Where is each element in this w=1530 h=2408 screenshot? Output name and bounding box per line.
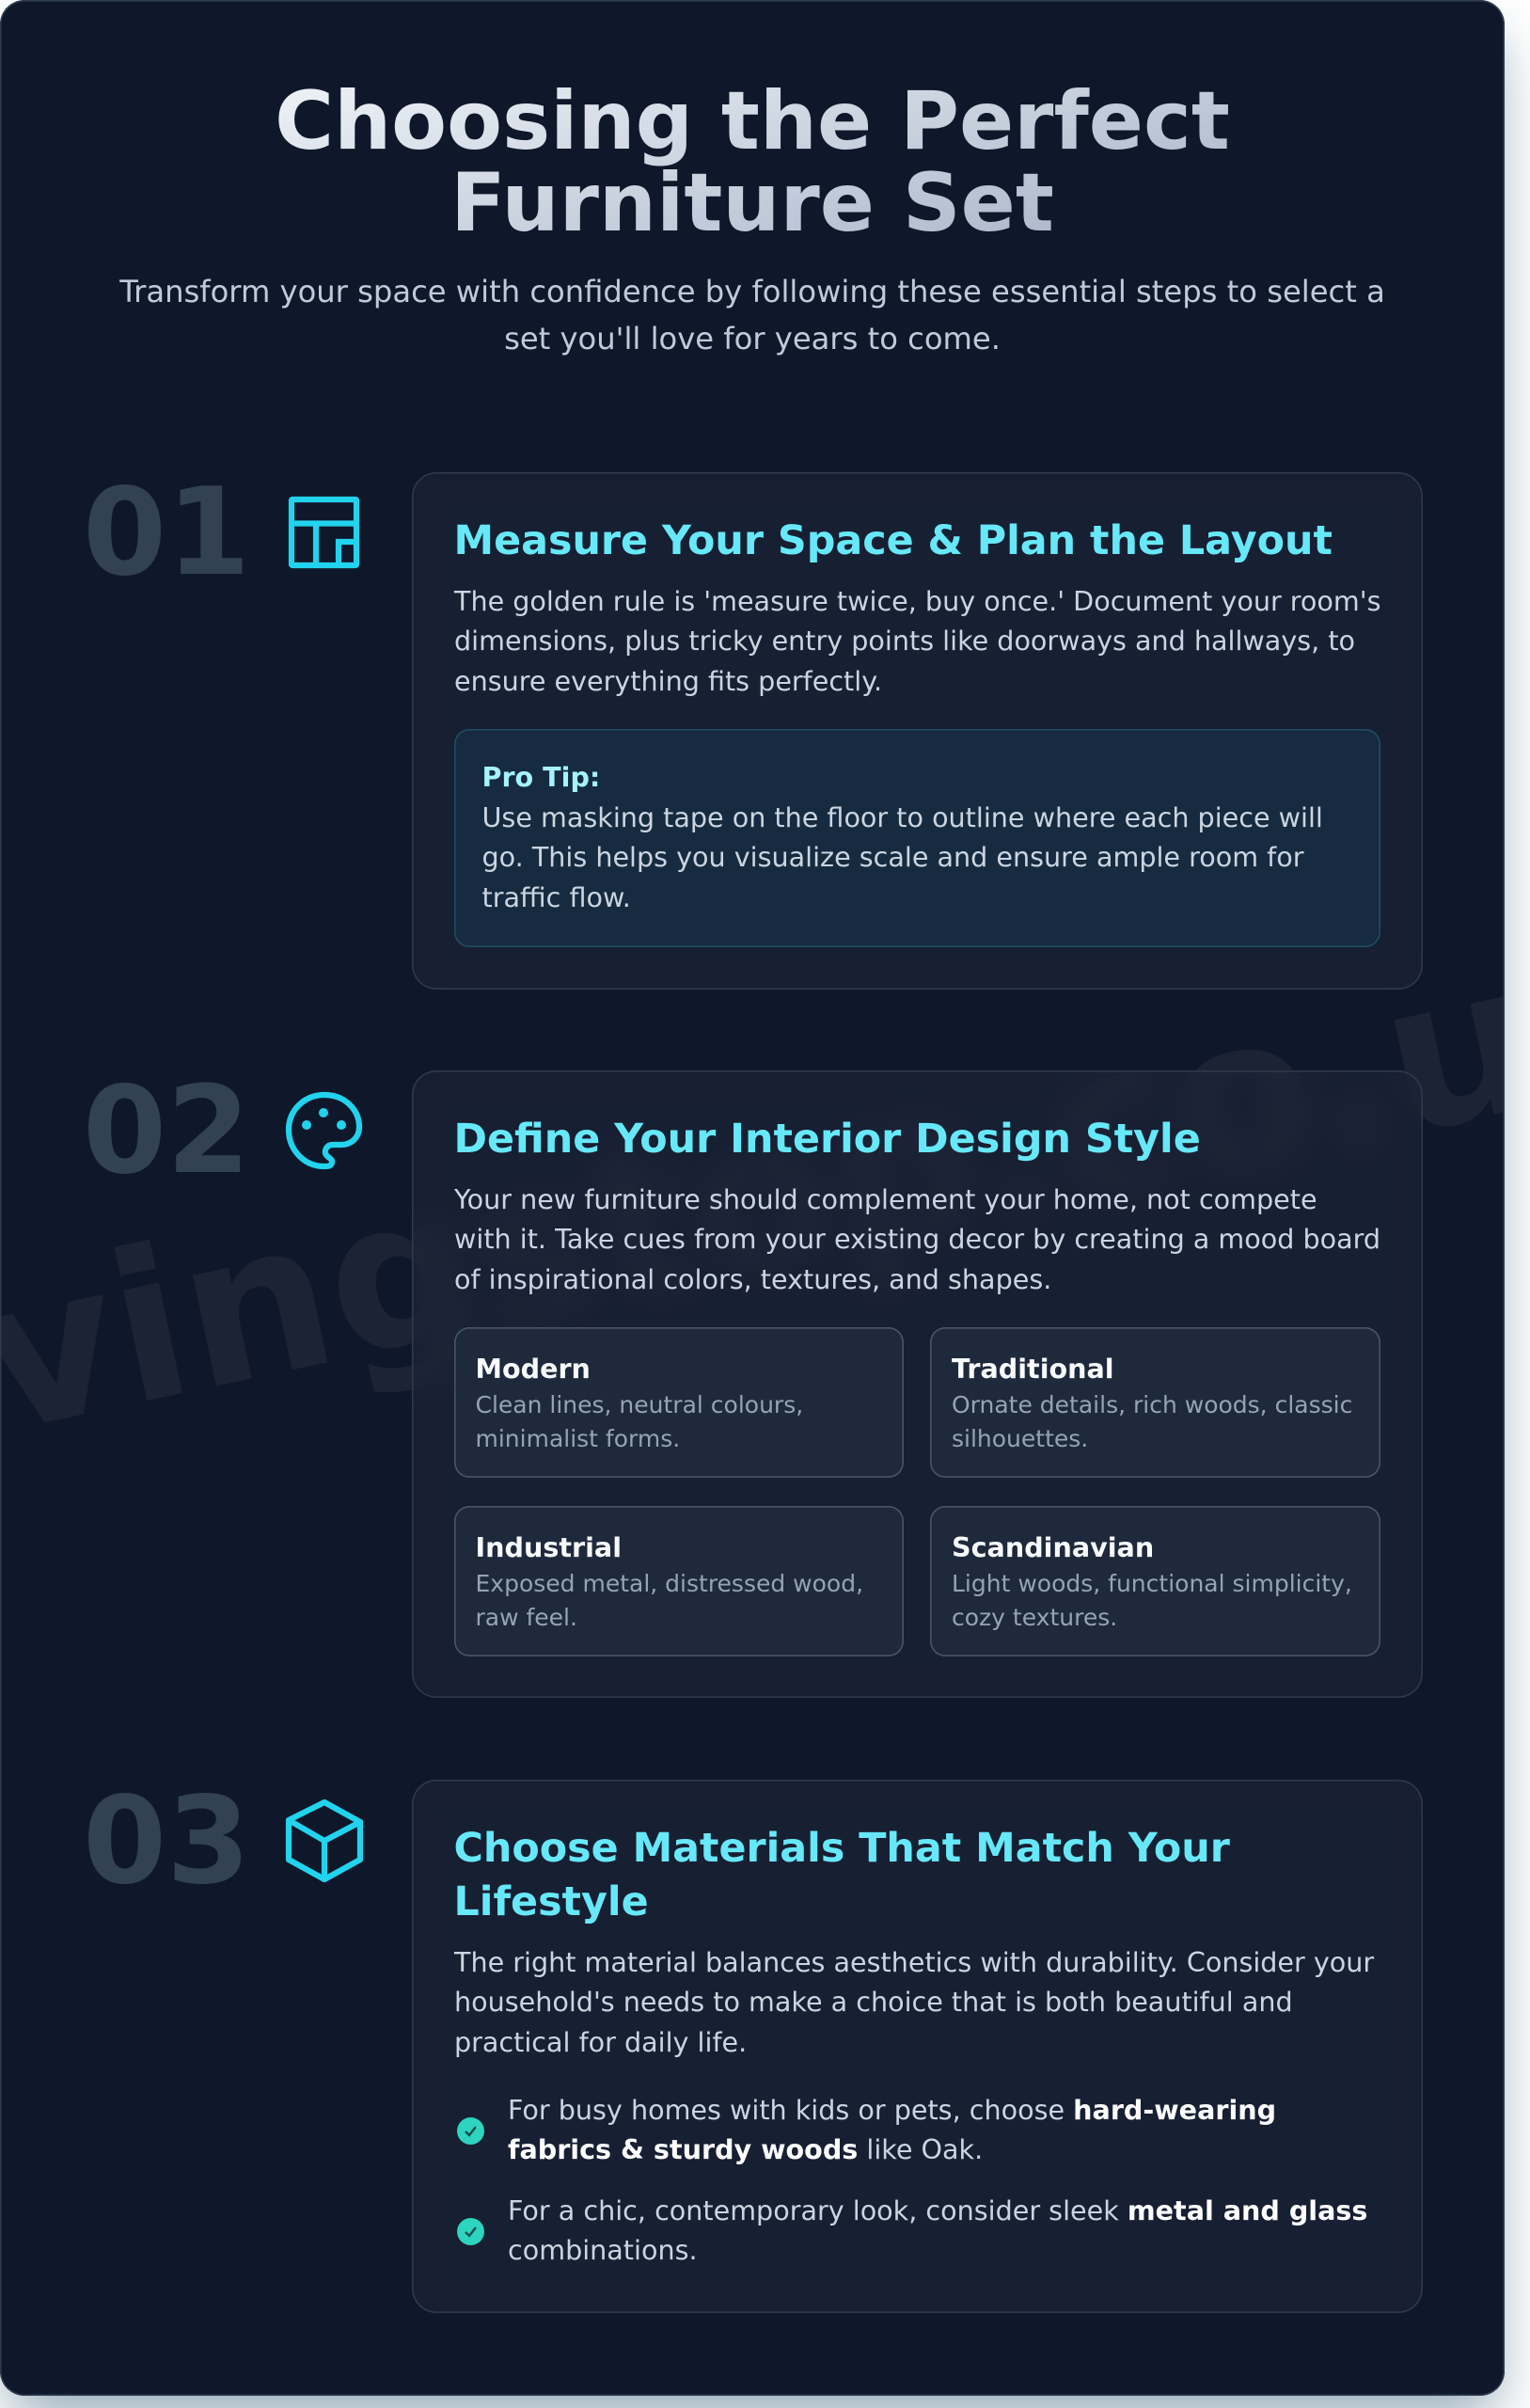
pro tip text [481,761,1323,913]
step number 01: 01 [83,463,250,603]
text: style description: of inspirational colors, textures, and shapes. [454,1263,1051,1295]
text: measure description: The golden rule is 'measure twice, buy once.' Document your room's [454,585,1381,617]
style card: scandinavian: cozy textures. [952,1604,1117,1631]
heading: measure: Measure Your Space & Plan the Layout [453,517,1333,564]
text: measure description [453,585,1381,697]
style card: traditional: silhouettes. [952,1425,1088,1452]
title: Furniture Set [450,156,1054,250]
pro tip text: traffic flow. [481,881,631,913]
style card: scandinavian: Scandinavian [952,1531,1154,1563]
panel: step 1 measure [412,472,1423,990]
style card: traditional: Ornate details, rich woods, classic [952,1391,1352,1418]
pro tip text: Pro Tip: [481,761,600,793]
style card: modern: Clean lines, neutral colours, [476,1391,803,1418]
text: materials description: The right material balances aesthetics with durability. Consider your [454,1945,1374,1977]
bullet: chic look: combinations. [508,2234,698,2266]
subtitle: Transform your space with confidence by following these essential steps to select a [119,274,1385,309]
step number 03: 03 [83,1771,250,1911]
pro tip text: go. This helps you visualize scale and ensure ample room for [481,841,1303,873]
heading: materials [453,1825,1230,1925]
bullet: chic look: For a chic, contemporary look, consider sleek metal and glass [508,2194,1367,2226]
panel: step 2 style [412,1070,1423,1698]
style card: industrial: Exposed metal, distressed wood, [476,1570,863,1597]
text: style description: with it. Take cues from your existing decor by creating a mood board [454,1223,1380,1255]
text: measure description: ensure everything fits perfectly. [454,665,882,697]
heading: style: Define Your Interior Design Style [453,1116,1201,1163]
text: materials description: practical for daily life. [454,2026,747,2058]
text: materials description [453,1945,1375,2058]
subtitle [119,274,1385,356]
title [0,81,1505,245]
style card: industrial: Industrial [476,1531,622,1563]
bullet: busy homes [508,2094,1276,2165]
step number 02: 02 [83,1061,250,1201]
panel: step 3 materials [412,1780,1423,2313]
style card: modern [453,1327,904,1478]
icon: check 2 [457,2218,484,2245]
text: measure description: dimensions, plus tricky entry points like doorways and hallways, to [454,625,1355,657]
callout: pro tip [453,729,1380,947]
bullet: busy homes: fabrics & sturdy woods like Oak. [508,2133,983,2165]
text: style description: Your new furniture should complement your home, not compete [454,1183,1317,1215]
title: Choosing the Perfect [275,74,1230,168]
style card: traditional [930,1327,1380,1478]
text: materials description: household's needs to make a choice that is both beautiful and [454,1986,1293,2018]
icon: check 1 [457,2117,484,2145]
style card: traditional: Traditional [952,1353,1114,1385]
bullet: busy homes: For busy homes with kids or pets, choose hard-wearing [508,2094,1276,2126]
bullet: chic look [508,2194,1367,2266]
style card: industrial: raw feel. [476,1604,577,1631]
subtitle: set you'll love for years to come. [504,321,1001,356]
style card: scandinavian [930,1506,1380,1656]
text: style description [454,1183,1380,1295]
heading: materials: Lifestyle [453,1878,649,1925]
style card: modern: minimalist forms. [476,1425,680,1452]
style card: scandinavian: Light woods, functional simplicity, [952,1570,1352,1597]
style card: modern: Modern [476,1353,591,1385]
style card: industrial [453,1506,904,1656]
heading: materials: Choose Materials That Match Your [453,1825,1230,1872]
pro tip text: Use masking tape on the floor to outline where each piece will [481,801,1323,833]
